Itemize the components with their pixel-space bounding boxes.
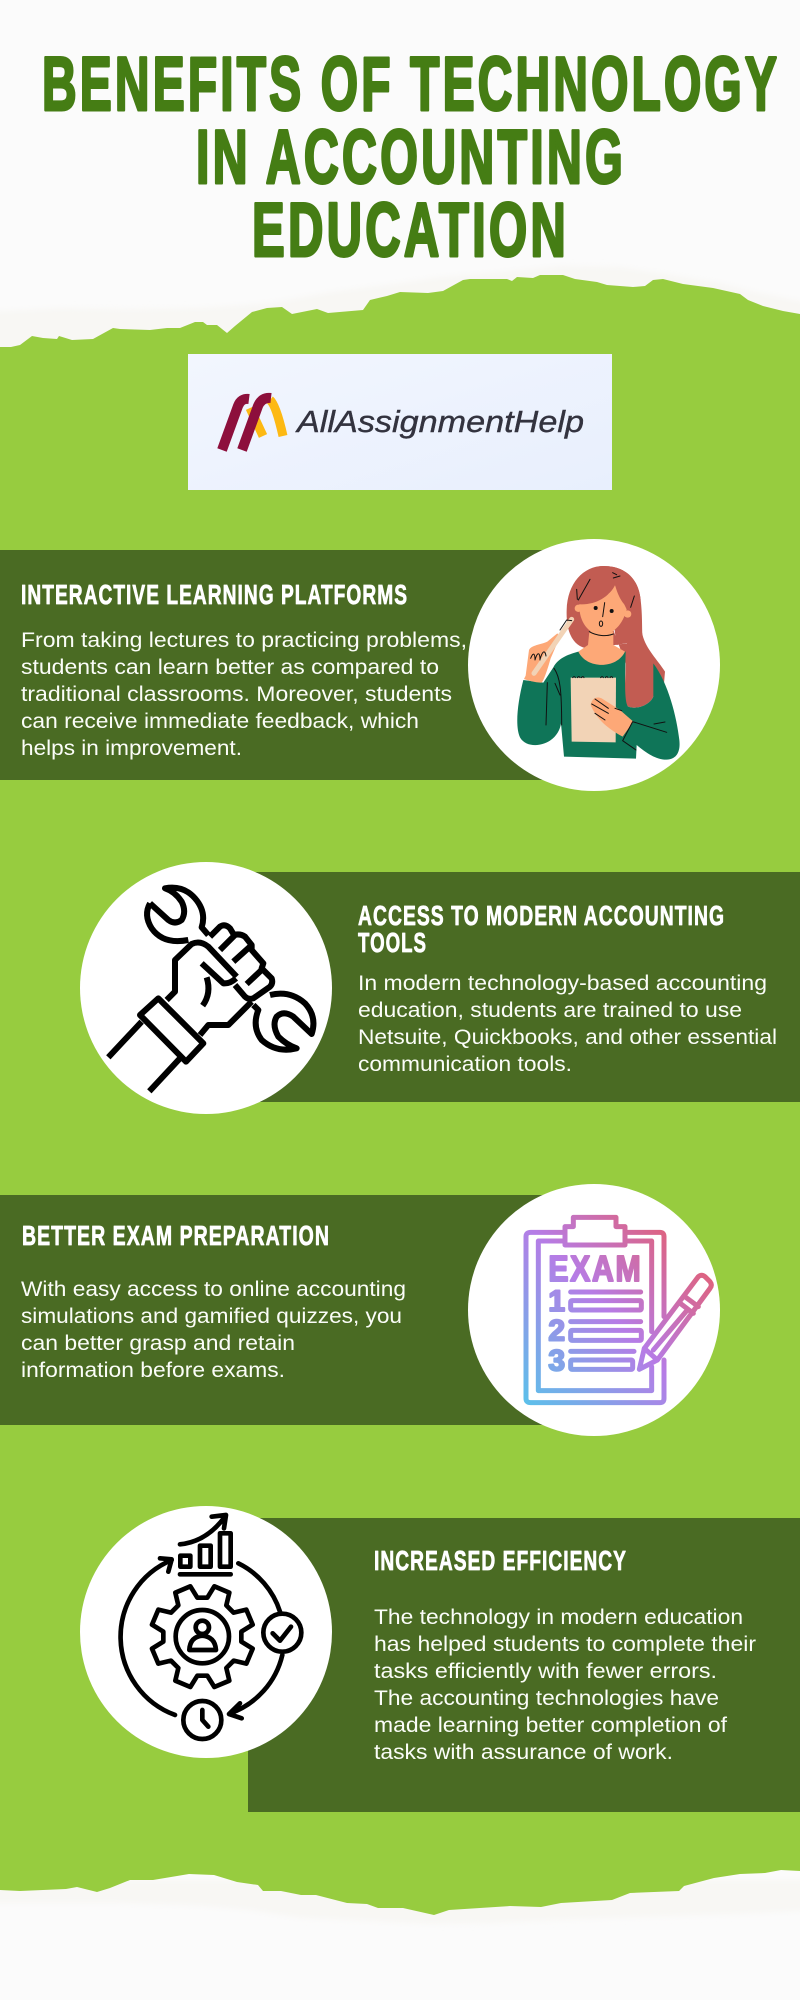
back hair [567,566,665,708]
text block: traditional classrooms. Moreover, students [21,682,452,706]
line details [531,573,667,750]
text block: In modern technology-based accounting [358,971,767,995]
panel: increased efficiency [248,1518,800,1812]
icon: exam clipboard and pencil: 2 [548,1315,565,1348]
text block: The technology in modern education [374,1605,743,1629]
title [42,42,780,273]
text block: tasks efficiently with fewer errors. [374,1659,717,1683]
text block: With easy access to online accounting [21,1277,406,1301]
text block: students can learn better as compared to [21,655,439,679]
text block: helps in improvement. [21,736,242,760]
icon: efficiency cycle with gear [80,1506,332,1758]
panel: better exam preparation [0,1195,560,1425]
logo card [188,354,612,490]
logo wordmark: AllAssignmentHelp [295,404,584,439]
text block: Netsuite, Quickbooks, and other essential [358,1025,777,1049]
text block [21,628,467,760]
text block: can receive immediate feedback, which [21,709,419,733]
text block: education, students are trained to use [358,998,742,1022]
text block: communication tools. [358,1052,572,1076]
lower hand [591,697,633,737]
panel: interactive learning platforms [0,550,560,780]
icon: exam clipboard and pencil: EXAM [548,1248,642,1289]
text block: has helped students to complete their [374,1632,756,1656]
torn paper edge: top [0,266,800,360]
torn paper edge: bottom [0,1880,800,1924]
notepad [571,678,616,742]
icon: exam clipboard and pencil: 1 [548,1285,565,1318]
icon: logo mark [222,398,283,450]
text block: tasks with assurance of work. [374,1740,673,1764]
text block: made learning better completion of [374,1713,727,1737]
text block [358,971,777,1076]
text block [21,1277,406,1382]
face and neck [578,632,625,665]
text block: simulations and gamified quizzes, you [21,1304,402,1328]
heading: INCREASED EFFICIENCY [374,1545,627,1576]
text block: From taking lectures to practicing problems, [21,628,467,652]
title: EDUCATION [252,188,569,273]
text block: can better grasp and retain [21,1331,295,1355]
sweater body and arms [517,652,680,760]
text block: The accounting technologies have [374,1686,719,1710]
heading: TOOLS [358,927,427,958]
heading: INTERACTIVE LEARNING PLATFORMS [21,579,408,610]
text block: information before exams. [21,1358,285,1382]
raised hand and pen [524,633,560,683]
icon: woman with notepad [468,539,720,791]
icon: exam clipboard and pencil [468,1184,720,1436]
text block [374,1605,756,1764]
heading: BETTER EXAM PREPARATION [22,1220,330,1251]
icon: exam clipboard and pencil: 3 [548,1345,565,1378]
icon: hand holding wrench [80,862,332,1114]
fringe [573,566,641,609]
panel: access to modern accounting tools [248,872,800,1102]
heading [358,900,725,958]
